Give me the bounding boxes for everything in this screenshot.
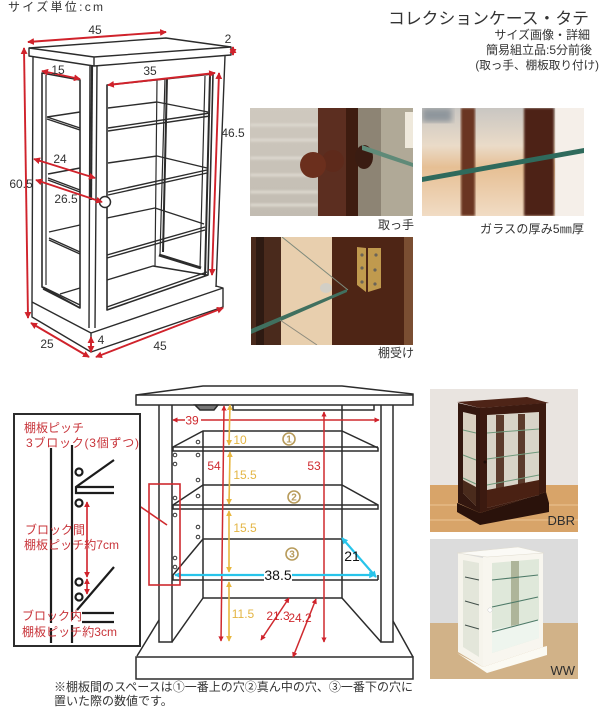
- dimension values: 53: [307, 459, 321, 473]
- photo: dark brown cabinet: [430, 389, 578, 532]
- circled shelf numbers: 1: [286, 434, 292, 446]
- footnote: 置いた際の数値です。: [54, 693, 173, 708]
- caption: glass thickness: ガラスの厚み5㎜厚: [480, 222, 584, 236]
- dimension values: 38.5: [264, 567, 292, 583]
- inset line art: [51, 445, 114, 643]
- detail inset: shelf pitch: [14, 414, 140, 646]
- title block: サイズ画像・詳細: [494, 27, 590, 42]
- photo: door knob: [250, 108, 413, 216]
- title block: 簡易組立品:5分前後: [486, 42, 592, 57]
- title block: [388, 9, 599, 72]
- inset captions: ブロック間: [25, 522, 85, 537]
- red height and width dimensions: [173, 406, 379, 657]
- cabinet section line art: [136, 386, 413, 679]
- label: WW: WW: [550, 663, 576, 678]
- dimension values: 21: [344, 548, 360, 564]
- dimension labels: 45: [153, 339, 167, 353]
- dimension labels: 60.5: [9, 177, 33, 191]
- shelf peg holes: [173, 440, 200, 569]
- dimension values: 10: [233, 433, 247, 447]
- cyan shelf size dimensions: [175, 538, 376, 577]
- dimension labels: 24: [53, 152, 67, 166]
- dimension values: 39: [185, 414, 199, 428]
- front section drawing: [135, 386, 413, 679]
- circled shelf numbers: 2: [291, 492, 297, 504]
- dimension labels: 26.5: [54, 192, 78, 206]
- label: DBR: DBR: [548, 513, 575, 528]
- circled shelf numbers: 3: [289, 550, 295, 560]
- dimension labels: 15: [51, 63, 65, 77]
- inset captions: ブロック内: [22, 608, 82, 623]
- dimension values: 15.5: [233, 468, 257, 482]
- photo: glass thickness: [422, 108, 584, 216]
- yellow shelf spacing dimensions: [229, 405, 230, 641]
- cabinet outline drawing with dimensions: [9, 23, 245, 357]
- dimension values: 15.5: [233, 521, 257, 535]
- dimension labels: 25: [40, 337, 54, 351]
- inset captions: 棚板ピッチ約7cm: [24, 537, 119, 552]
- circled shelf numbers: [283, 433, 300, 560]
- dimension values: 11.5: [232, 607, 255, 621]
- photo: shelf support: [251, 237, 413, 345]
- dimension values: [185, 413, 360, 625]
- inset captions: 棚板ピッチ約3cm: [22, 624, 117, 639]
- inset captions: [22, 420, 139, 639]
- footnote: [54, 679, 413, 708]
- red dimension arrows: [24, 32, 233, 357]
- footnote: ※棚板間のスペースは①一番上の穴②真ん中の穴、③一番下の穴に: [54, 679, 413, 694]
- unit note: サイズ単位:cm: [8, 0, 103, 14]
- dimension labels: 45: [88, 23, 102, 37]
- caption: handle: 取っ手: [378, 218, 414, 232]
- dimension labels: 4: [98, 333, 105, 347]
- photo: white cabinet: [430, 539, 578, 679]
- dimension values: 21.3: [266, 609, 290, 623]
- cabinet line art: [29, 38, 231, 352]
- title block: コレクションケース・タテ: [388, 9, 589, 28]
- dimension values: 54: [207, 459, 221, 473]
- inset captions: 棚板ピッチ: [24, 420, 84, 435]
- dimension labels: 46.5: [221, 126, 245, 140]
- title block: (取っ手、棚板取り付け): [475, 58, 599, 72]
- dimension values: 24.2: [288, 611, 312, 625]
- dimension labels: 35: [143, 64, 157, 78]
- caption: shelf support: 棚受け: [378, 345, 414, 360]
- dimension labels: 2: [225, 32, 232, 46]
- dimension labels: [9, 23, 245, 353]
- inset pitch arrows: [86, 502, 88, 594]
- inset captions: 3ブロック(3個ずつ): [26, 435, 139, 450]
- highlight box and arrow to detail: [135, 484, 180, 585]
